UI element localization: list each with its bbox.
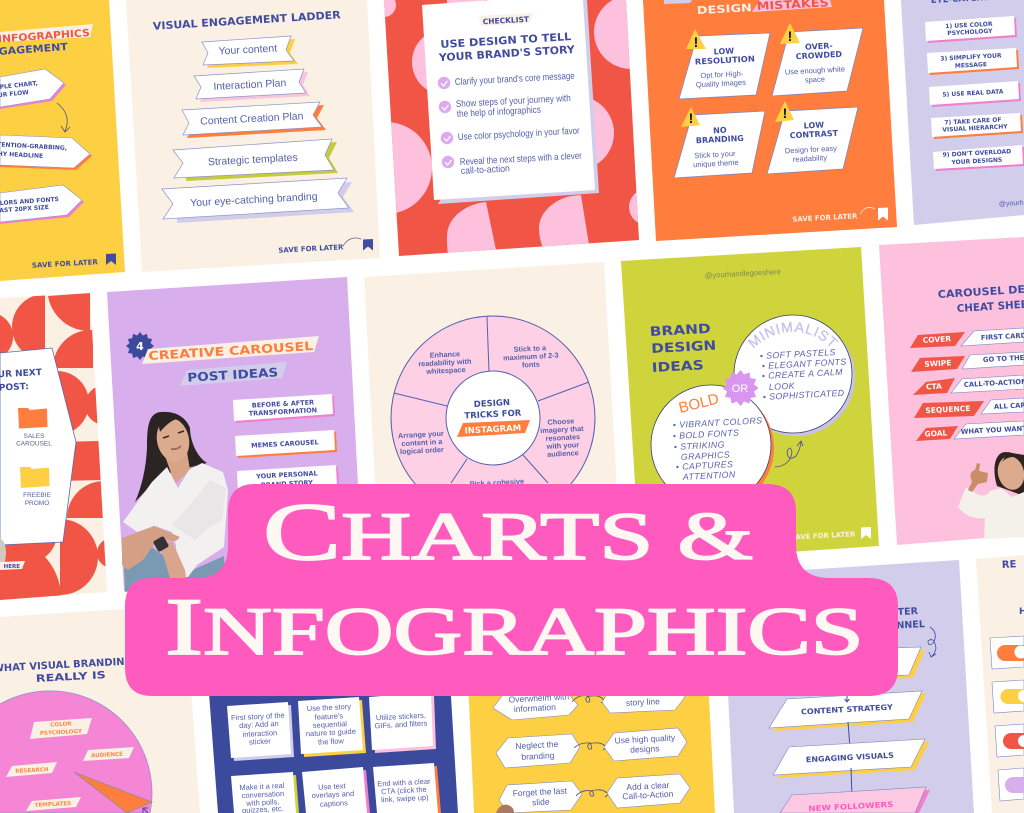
hex: forget last slide — [499, 781, 582, 813]
note: cta: link, swipe up) — [381, 793, 429, 804]
note: sequential: nature to guide — [306, 727, 356, 738]
ribbon: content creation plan — [182, 102, 326, 138]
heading: REALLY IS — [36, 670, 106, 685]
segment: order: logical order — [400, 445, 444, 456]
card: low resolution: LOW — [713, 46, 734, 57]
panel: carousel design cheat sheet — [879, 237, 1024, 545]
save for later — [32, 254, 116, 270]
note: sequential: sequential — [313, 719, 348, 730]
note: polls: Make it a real — [239, 781, 285, 792]
connector — [572, 696, 605, 703]
hex: high quality designs: designs — [630, 743, 660, 755]
icon: warning: ! — [689, 110, 693, 126]
segment: fonts: fonts — [522, 360, 540, 369]
heading — [649, 322, 717, 376]
portrait fragment — [0, 539, 6, 567]
arrow box: simple chart — [0, 69, 66, 109]
row: swipe: SWIPE — [924, 358, 952, 369]
note: overlays: Use text — [318, 781, 347, 792]
wheel hub — [446, 371, 540, 465]
heading: FUNNEL — [882, 619, 925, 632]
segment: fonts: maximum of 2-3 — [503, 351, 559, 362]
circle: bold: • CAPTURES — [676, 459, 733, 472]
note: cta: End with a clear — [377, 777, 431, 788]
heading: IDEAS — [651, 358, 704, 376]
idea card: memes carousel — [235, 430, 337, 458]
card title: YOUR BRAND'S STORY — [438, 44, 575, 64]
segment: imagery: Choose — [547, 416, 574, 427]
check item 4: Reveal the next steps with a clever — [460, 151, 582, 168]
ribbon: content creation plan: Content Creation Plan — [200, 110, 304, 128]
note: first story: interaction — [242, 728, 277, 739]
photo: woman thumbs up — [958, 452, 1024, 539]
hex: high quality designs — [604, 728, 687, 761]
icon: warning: ! — [788, 28, 792, 44]
tag: audience — [83, 747, 134, 761]
arrow: blue — [143, 808, 148, 813]
note: overlays — [302, 767, 370, 813]
handle tag: HERE — [4, 564, 20, 570]
arrow: curly — [928, 627, 936, 657]
idea card: before & after — [233, 394, 335, 423]
segment: whitespace: Enhance — [429, 349, 460, 360]
segment: order — [398, 429, 444, 456]
circle: bold: • STRIKING — [674, 439, 725, 452]
title line 1: CHARTS & — [263, 486, 753, 577]
check item 1: Clarify your brand's core message — [455, 71, 575, 88]
circle: minimalist: • SOPHISTICATED — [763, 388, 845, 402]
tip 3 — [927, 48, 1019, 75]
checklist card — [422, 0, 599, 204]
circle: minimalist: • SOFT PASTELS — [760, 347, 836, 361]
title line 2: INFOGRAPHICS — [165, 581, 864, 672]
heading band: post ideas: POST IDEAS — [187, 365, 279, 385]
segment: whitespace: whitespace — [425, 365, 466, 376]
heading: BRAND — [649, 322, 711, 340]
folder: sales carousel: CAROUSEL — [16, 440, 52, 448]
card: low contrast — [767, 107, 858, 174]
circle: bold: ATTENTION — [682, 469, 736, 482]
circle: minimalist: MINIMALIST — [748, 322, 838, 348]
idea card: personal brand story: BRAND STORY — [261, 479, 313, 489]
tag: templates: TEMPLATES — [35, 801, 71, 809]
segment: fonts — [503, 343, 559, 369]
hex: high quality designs: Use high quality — [614, 732, 676, 746]
check item 2: the help of infographics — [457, 105, 541, 120]
folder: freebie promo — [20, 467, 52, 507]
ribbon: your content: Your content — [218, 42, 277, 58]
arrow — [850, 768, 854, 798]
ribbon: eye-catching branding — [162, 178, 354, 223]
hub label — [457, 398, 530, 437]
handle tag — [0, 561, 25, 570]
card title: USE DESIGN TO TELL — [440, 31, 572, 51]
tip 9 — [933, 145, 1024, 171]
card: low contrast: LOW — [803, 120, 824, 131]
check item 1 — [438, 71, 575, 89]
funnel step: top — [780, 647, 925, 683]
badge: or — [722, 370, 758, 406]
check item 2: Show steps of your journey with — [456, 93, 571, 110]
card: over-crowded: Use enough white — [785, 64, 845, 77]
note: stickers: GIFs, and filters — [374, 719, 428, 730]
badge: or: OR — [732, 383, 748, 395]
icon: warning — [681, 107, 700, 127]
segment: imagery: audience — [547, 448, 579, 459]
hex: call-to-action: Call-to-Action — [622, 789, 674, 801]
note: cta: CTA (click the — [381, 785, 427, 796]
row: goal — [916, 421, 1024, 441]
hub label: TRICKS FOR — [464, 408, 522, 421]
note: sequential: Use the story — [307, 702, 351, 713]
heading: DESIGN — [651, 339, 717, 357]
check item 4 — [442, 151, 582, 177]
panel: design tricks for instagram — [364, 262, 617, 520]
funnel step: content strategy — [769, 691, 926, 731]
panel: design mistakes — [643, 0, 897, 241]
circle: minimalist: LOOK — [769, 381, 796, 392]
check item 2 — [439, 93, 571, 120]
heading band: post ideas — [180, 362, 287, 386]
row: sequence — [914, 398, 1024, 418]
heading — [664, 0, 832, 17]
save for later — [278, 238, 373, 255]
segment: imagery: imagery that — [540, 424, 584, 435]
heading: DESIGN — [697, 2, 752, 17]
row: goal: GOAL — [924, 428, 948, 439]
tag: color psychology: COLOR — [50, 721, 72, 729]
photo: seated woman — [122, 412, 228, 592]
card: low resolution: Opt for High- — [700, 69, 744, 80]
heading: BETTER — [877, 606, 919, 619]
panel: better funnel — [722, 560, 974, 813]
icon: warning: ! — [694, 34, 698, 50]
save for later: SAVE FOR LATER — [790, 530, 856, 542]
note: first story: First story of the — [231, 711, 285, 722]
ribbon: your content — [202, 36, 298, 68]
circle: minimalist: • ELEGANT FONTS — [762, 357, 847, 371]
circle: minimalist — [734, 314, 855, 436]
folder: sales carousel — [16, 408, 52, 448]
folder: freebie promo: PROMO — [25, 500, 49, 507]
card: no branding — [674, 111, 765, 178]
note: polls — [231, 772, 299, 813]
connector — [574, 743, 607, 750]
panel: what visual branding really is — [0, 605, 200, 813]
arrow box: attention-grabbing headline — [0, 135, 92, 170]
idea card: personal brand story: YOUR PERSONAL — [255, 469, 318, 481]
row: cta: CTA — [926, 382, 942, 391]
tip 5: 5) USE REAL DATA — [942, 88, 1004, 99]
toggle: red — [995, 724, 1024, 757]
hex: story line: story line — [626, 696, 660, 708]
icon: warning — [686, 29, 706, 50]
tip 7 — [931, 113, 1023, 139]
segment: whitespace: readability with — [418, 357, 472, 368]
heading — [877, 606, 925, 632]
pointer — [74, 772, 152, 813]
tag: templates — [26, 797, 81, 811]
funnel step: new followers — [780, 787, 930, 813]
toggle: yellow — [992, 680, 1024, 713]
handle: @yourhandlegoeshere — [705, 267, 781, 280]
ribbon: eye-catching branding: Your eye-catching branding — [190, 191, 318, 209]
tag: research — [6, 762, 57, 777]
note: polls: conversation — [241, 789, 284, 800]
panel: creative carousel post ideas — [107, 277, 362, 592]
tip 1: 1) USE COLOR — [945, 21, 993, 30]
arrow: curved down — [57, 103, 70, 132]
heading — [0, 656, 133, 685]
tip 1 — [925, 16, 1017, 43]
card: low resolution: Quality Images — [696, 78, 746, 89]
panel: next post pattern — [0, 293, 107, 600]
hex: neglect branding — [496, 734, 580, 768]
hex: forget last slide: Forget the last — [512, 786, 568, 798]
arrow — [848, 722, 852, 749]
segment: imagery: with your — [545, 440, 579, 451]
note: overlays: overlays and — [311, 789, 354, 800]
panel: carousel dos and don'ts — [468, 680, 715, 813]
tag: color psychology: PSYCHOLOGY — [40, 729, 83, 737]
save for later — [790, 527, 871, 542]
row: cta — [913, 375, 1024, 395]
card: no branding: Stick to your — [694, 149, 736, 160]
badge: number 4 — [126, 332, 154, 360]
tip 1: PSYCHOLOGY — [947, 28, 993, 37]
hex: overwhelm: information — [514, 702, 556, 714]
hex: neglect branding: branding — [521, 750, 555, 762]
card: no branding: BRANDING — [696, 134, 744, 145]
hex: overwhelm — [493, 690, 578, 720]
tip 9: YOUR DESIGNS — [950, 157, 1002, 166]
ribbon: strategic templates — [173, 139, 338, 181]
note: first story: sticker — [249, 736, 271, 747]
card heading — [0, 368, 43, 395]
pie chart — [0, 691, 152, 813]
circle: bold: BOLD — [677, 390, 721, 417]
badge: number 4: 4 — [136, 340, 144, 353]
card: no branding: unique theme — [693, 158, 739, 169]
panel: toggles — [976, 555, 1024, 813]
save for later: SAVE FOR LATER — [32, 258, 99, 270]
tag: audience: AUDIENCE — [91, 752, 123, 759]
card: low contrast: CONTRAST — [789, 129, 839, 140]
segment: whitespace — [418, 349, 472, 376]
idea card: personal brand story — [237, 465, 339, 495]
tip 9: 9) DON'T OVERLOAD — [942, 148, 1011, 159]
check item 4: call-to-action — [461, 163, 510, 177]
segment: fonts: Stick to a — [513, 343, 547, 354]
save for later — [792, 207, 888, 224]
segment: palette: Pick a cohesive — [469, 477, 524, 488]
note: sequential: feature's — [314, 711, 344, 722]
card: low resolution: RESOLUTION — [695, 54, 755, 67]
row: swipe — [911, 352, 1024, 372]
funnel step: content strategy: CONTENT STRATEGY — [801, 703, 894, 716]
row: cover: COVER — [922, 334, 951, 345]
segment: order: Arrange your — [398, 429, 444, 440]
hex: forget last slide: slide — [532, 797, 550, 807]
panel: eye-catching tips — [901, 0, 1024, 225]
title banner — [125, 484, 898, 696]
panel: checklist — [384, 0, 639, 256]
hub label: DESIGN — [474, 398, 510, 410]
circle: bold: • VIBRANT COLORS — [673, 415, 763, 430]
tag: color psychology — [30, 718, 92, 739]
row: cover — [910, 328, 1024, 348]
funnel step: new followers: NEW FOLLOWERS — [808, 800, 894, 813]
heading — [1002, 559, 1024, 617]
card: over-crowded: space — [805, 74, 825, 85]
note: first story: day: Add an — [239, 719, 279, 730]
heading: RE — [1002, 559, 1017, 571]
row: swipe: GO TO THE — [983, 354, 1024, 364]
tag: research: RESEARCH — [15, 767, 49, 775]
heading band: INFOGRAPHICS — [0, 28, 90, 45]
icon: warning — [775, 101, 794, 122]
card title — [438, 31, 575, 64]
ribbon: interaction plan: Interaction Plan — [213, 77, 287, 93]
toggle: lavender — [998, 768, 1024, 801]
hex: call-to-action: Add a clear — [626, 780, 670, 792]
icon: warning: ! — [783, 105, 787, 121]
card: low contrast: Design for easy — [785, 144, 837, 155]
panel: infographics for engagement — [0, 0, 125, 281]
ribbon: interaction plan — [194, 69, 310, 102]
ribbon: strategic templates: Strategic templates — [208, 152, 298, 168]
panel: instagram story tips — [208, 680, 458, 813]
idea card: memes carousel: MEMES CAROUSEL — [251, 438, 319, 450]
note: cta — [373, 763, 441, 813]
tip 7: 7) TAKE CARE OF — [944, 117, 1002, 126]
funnel step: engaging visuals: ENGAGING VISUALS — [806, 751, 894, 764]
icon: warning — [780, 23, 800, 44]
connector — [576, 790, 609, 797]
circle: bold: GRAPHICS — [681, 449, 730, 462]
toggle: orange — [990, 636, 1024, 669]
tip 7: VISUAL HIERARCHY — [942, 123, 1008, 134]
arrow box: colors and fonts — [0, 185, 84, 224]
note: sequential: the flow — [318, 736, 345, 747]
idea card: before & after: TRANSFORMATION — [249, 406, 317, 418]
portrait fragment — [496, 805, 514, 813]
segment: imagery — [540, 416, 584, 459]
card: over-crowded: OVER- — [805, 41, 833, 52]
check item 3 — [441, 126, 580, 144]
wheel chart — [391, 316, 595, 520]
hex: neglect branding: Neglect the — [515, 739, 559, 751]
tip 3: 3) SIMPLIFY YOUR — [940, 52, 1002, 63]
panel: brand design ideas — [621, 247, 879, 552]
heading band: creative carousel: CREATIVE CAROUSEL — [148, 339, 314, 363]
note: polls: with polls, — [245, 797, 280, 808]
hub label: INSTAGRAM — [464, 424, 521, 436]
tip 5 — [929, 81, 1021, 107]
card: over-crowded: CROWDED — [795, 50, 843, 61]
panel: visual engagement ladder — [126, 0, 380, 272]
heading — [937, 282, 1024, 315]
note: stickers: Utilize stickers, — [376, 711, 426, 722]
tag: checklist: CHECKLIST — [483, 15, 530, 26]
folder: sales carousel: SALES — [24, 433, 45, 440]
heading band: creative carousel — [142, 336, 319, 364]
segment: imagery: resonates — [545, 432, 580, 443]
note: stickers — [369, 692, 436, 753]
tip 3: MESSAGE — [955, 61, 987, 70]
note: sequential — [298, 697, 366, 757]
hex: overwhelm: Overwhelm with — [508, 691, 570, 705]
save for later: SAVE FOR LATER — [792, 212, 858, 224]
heading: VISUAL ENGAGEMENT LADDER — [153, 9, 341, 33]
circle: bold: • BOLD FONTS — [673, 428, 740, 441]
arrow: squiggle — [775, 441, 803, 467]
note: first story — [227, 702, 294, 761]
card: low contrast: readability — [793, 153, 827, 164]
row: sequence: SEQUENCE — [925, 404, 971, 415]
hex: story line — [602, 688, 685, 713]
funnel step: engaging visuals — [773, 739, 929, 778]
circle: bold — [651, 385, 774, 508]
note: overlays: captions — [320, 798, 348, 809]
card: low resolution — [679, 33, 770, 99]
hexagon card — [0, 348, 76, 545]
idea card: before & after: BEFORE & AFTER — [252, 398, 314, 410]
heading band — [0, 24, 93, 59]
arrow — [844, 695, 850, 702]
save for later: SAVE FOR LATER — [278, 243, 344, 255]
hex: call-to-action — [607, 774, 690, 808]
card: over-crowded — [772, 28, 863, 96]
check item 3: Use color psychology in your favor — [458, 126, 580, 143]
circle: minimalist: • CREATE A CALM — [762, 367, 843, 381]
folder: freebie promo: FREEBIE — [23, 492, 52, 499]
segment: order: content in a — [401, 437, 443, 448]
card: no branding: NO — [713, 126, 727, 135]
